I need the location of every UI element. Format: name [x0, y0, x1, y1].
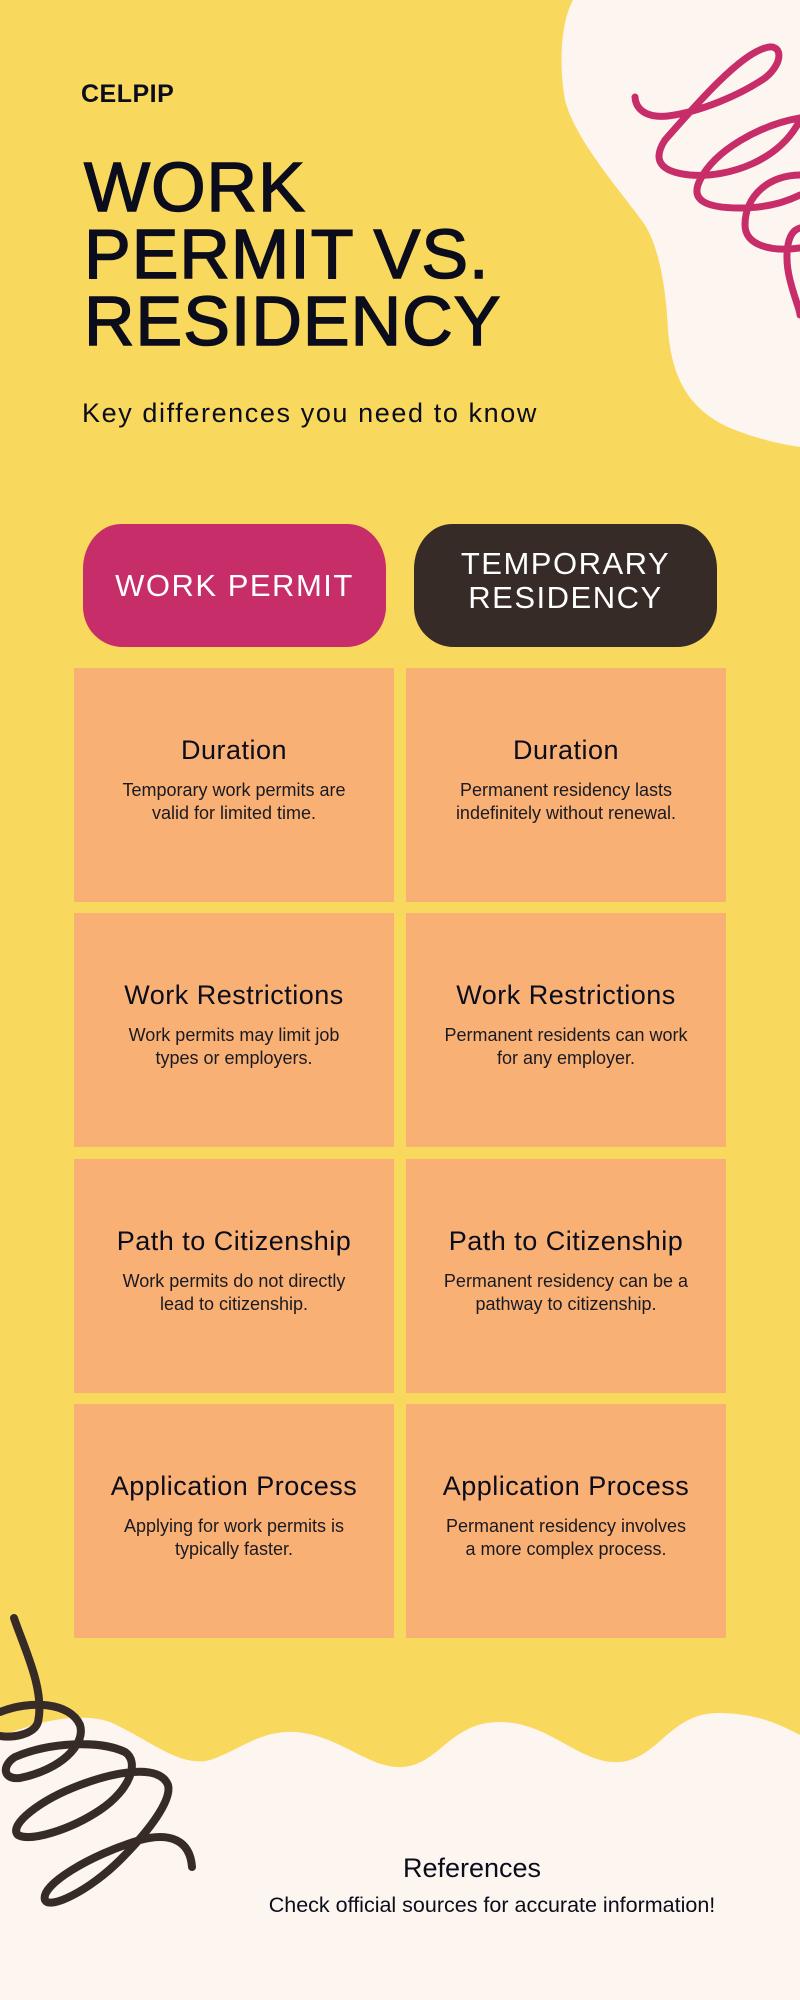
icon: dark scribble	[0, 1614, 196, 1907]
bottom wave	[0, 1713, 800, 2000]
title: PERMIT VS.	[84, 215, 489, 293]
cell: work restrictions residency: for any employer.	[497, 1048, 635, 1068]
cell: application work permit: Applying for work permits is	[124, 1516, 344, 1536]
cell: application work permit	[74, 1404, 394, 1638]
cell: citizenship work permit	[74, 1159, 394, 1393]
cell: citizenship residency: Permanent residency can be a	[444, 1271, 688, 1291]
header: temporary residency	[414, 524, 717, 647]
cell: application residency: a more complex process.	[465, 1539, 667, 1559]
cell: work restrictions residency: Work Restrictions	[456, 980, 676, 1010]
title	[83, 148, 501, 360]
header: temporary residency: RESIDENCY	[468, 580, 663, 614]
cell: duration work permit: Temporary work permits are	[122, 780, 346, 800]
cell: work restrictions residency: Permanent residents can work	[444, 1025, 688, 1045]
cell: work restrictions work permit	[74, 913, 394, 1147]
cell: duration work permit: Duration	[181, 735, 287, 765]
title: RESIDENCY	[84, 282, 501, 360]
cell: citizenship residency: pathway to citizenship.	[475, 1294, 657, 1314]
cell: application residency: Application Process	[443, 1471, 689, 1501]
cell: work restrictions work permit: Work Restrictions	[124, 980, 344, 1010]
cell: duration residency: Permanent residency lasts	[460, 780, 672, 800]
subtitle: Key differences you need to know	[82, 398, 538, 428]
cell: citizenship work permit: lead to citizenship.	[160, 1294, 308, 1314]
cell: citizenship residency	[406, 1159, 726, 1393]
cell: work restrictions work permit: types or employers.	[155, 1048, 313, 1068]
cell: application work permit: Application Process	[111, 1471, 357, 1501]
cell: duration work permit: valid for limited time.	[152, 803, 316, 823]
cell: work restrictions work permit: Work permits may limit job	[129, 1025, 339, 1045]
cell: duration residency: Duration	[513, 735, 619, 765]
background blob top right	[562, 0, 800, 447]
references heading: References	[403, 1853, 541, 1883]
title: WORK	[84, 148, 306, 226]
brand: CELPIP: CELPIP	[81, 80, 174, 108]
references text: Check official sources for accurate information!	[269, 1893, 715, 1917]
header: work permit: WORK PERMIT	[115, 568, 354, 602]
cell: application residency	[406, 1404, 726, 1638]
cell: duration residency	[406, 668, 726, 902]
cell: citizenship work permit: Path to Citizenship	[117, 1226, 351, 1256]
cell: application residency: Permanent residency involves	[446, 1516, 686, 1536]
cell: citizenship work permit: Work permits do not directly	[123, 1271, 345, 1291]
cell: application work permit: typically faster.	[175, 1539, 293, 1559]
cell: citizenship residency: Path to Citizenship	[449, 1226, 683, 1256]
header: work permit	[83, 524, 386, 647]
icon: pink scribble	[632, 43, 800, 318]
cell: duration residency: indefinitely without renewal.	[456, 803, 676, 823]
header: temporary residency: TEMPORARY	[461, 546, 670, 580]
cell: duration work permit	[74, 668, 394, 902]
cell: work restrictions residency	[406, 913, 726, 1147]
